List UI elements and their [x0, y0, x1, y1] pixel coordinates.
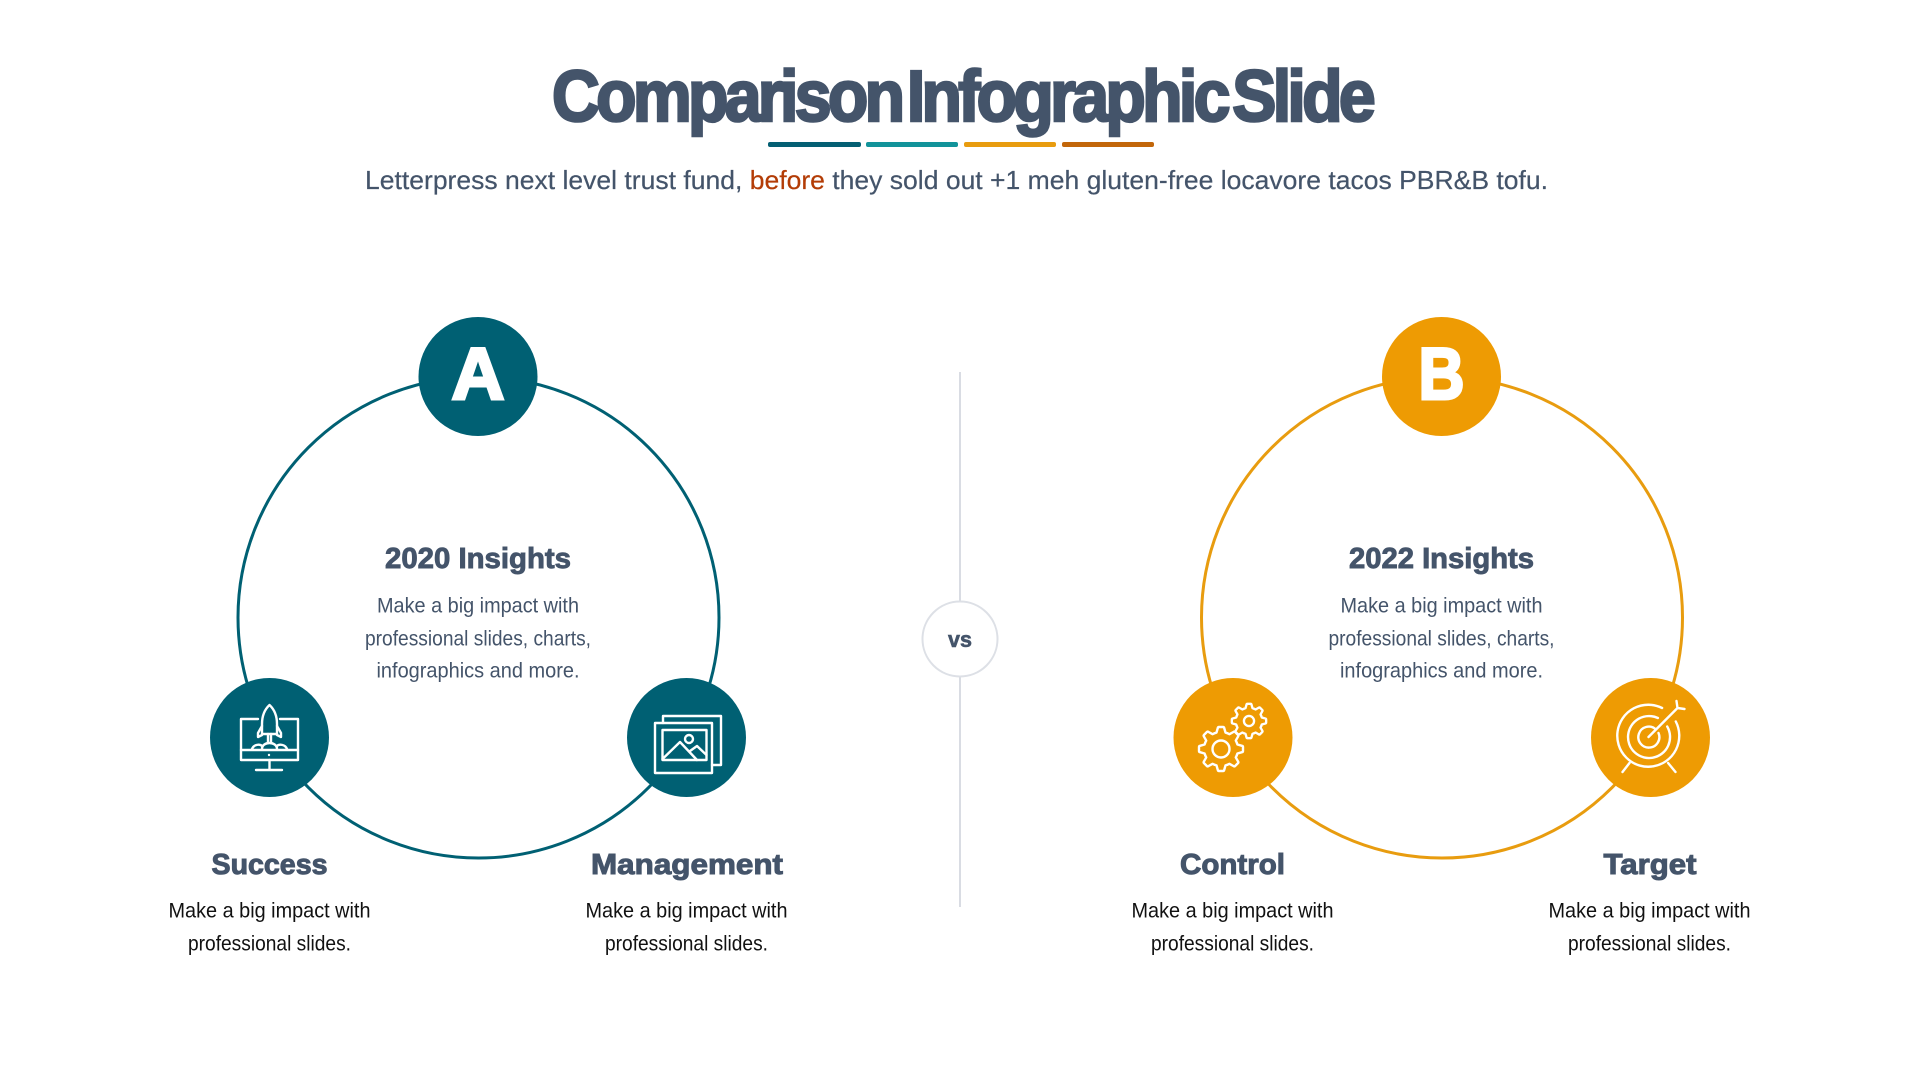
description B	[1328, 594, 1554, 682]
label: Target: professional slides.	[1568, 932, 1731, 956]
panel: A 2020 insights	[168, 317, 788, 956]
ring A	[238, 377, 719, 858]
label: Control: Make a big impact with	[1132, 900, 1334, 922]
description A: infographics and more.	[376, 660, 580, 682]
label: Management: Make a big impact with	[586, 900, 788, 922]
subtitle: Letterpress next level trust fund, before they sold out +1 meh gluten-free locavore tacos PBR&B tofu.	[365, 165, 1548, 195]
heading: 2020 Insights: 2020 Insights	[385, 543, 571, 575]
label: Target	[1548, 849, 1750, 956]
description B: professional slides, charts,	[1328, 628, 1554, 650]
label: Management	[586, 849, 788, 956]
badge B: B	[1418, 334, 1464, 415]
label: Success	[168, 849, 370, 956]
label: Success: Success	[212, 849, 328, 881]
label: Control: professional slides.	[1151, 932, 1314, 956]
panel: B 2022 insights	[1132, 317, 1750, 956]
icon: rocket on monitor	[210, 678, 329, 797]
label: Management: Management	[591, 849, 783, 881]
label: Management: professional slides.	[605, 932, 768, 956]
description A: Make a big impact with	[377, 594, 579, 618]
badge A: A	[452, 334, 504, 415]
label: Success: professional slides.	[188, 932, 351, 956]
label: Target: Target	[1604, 849, 1697, 881]
label: Control	[1132, 849, 1334, 956]
ring B	[1202, 377, 1682, 858]
label: Target: Make a big impact with	[1548, 900, 1750, 922]
label: Control: Control	[1180, 849, 1285, 881]
description A: professional slides, charts,	[365, 628, 591, 650]
badge A	[418, 317, 538, 436]
description A	[365, 594, 591, 682]
description B: Make a big impact with	[1340, 594, 1542, 618]
title underline bars	[768, 142, 1154, 147]
icon: target	[1591, 678, 1710, 797]
description B: infographics and more.	[1340, 660, 1543, 682]
heading: 2022 Insights: 2022 Insights	[1349, 543, 1534, 575]
badge B	[1382, 317, 1501, 436]
vs label: vs	[948, 627, 972, 652]
label: Success: Make a big impact with	[168, 900, 370, 922]
icon: image gallery	[627, 678, 746, 797]
icon: gears	[1174, 678, 1292, 797]
center divider with vs badge	[922, 372, 998, 907]
title: Comparison Infographic Slide	[552, 57, 1374, 137]
